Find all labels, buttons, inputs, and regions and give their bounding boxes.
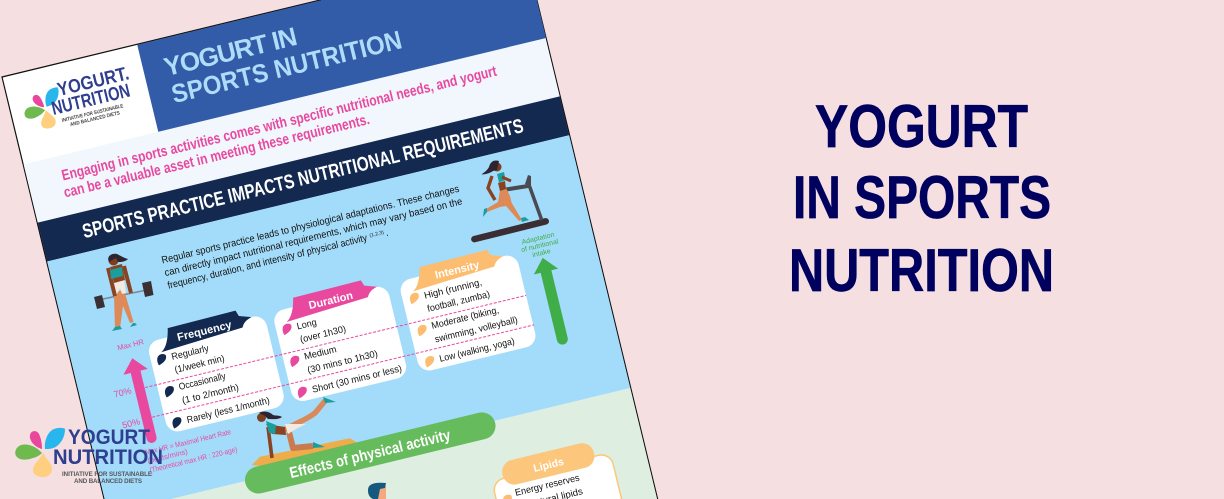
- arrow: heart rate: [120, 355, 165, 446]
- logo in header: [19, 63, 138, 138]
- heart rate note: (Theoretical max HR : 220-age): [149, 445, 239, 475]
- heart rate labels: [102, 337, 163, 431]
- panel: intro band: [24, 38, 560, 223]
- card: duration: [270, 275, 409, 404]
- heart rate note: (beats/mins): [146, 447, 189, 465]
- icon: logo flower: [20, 87, 67, 133]
- body paragraph: .: [384, 228, 390, 239]
- list: intensity levels: football, zumba): [426, 289, 491, 315]
- overlay logo: INITIATIVE FOR SUSTAINABLE: [62, 471, 152, 478]
- list: frequency levels: Occasionally: [178, 371, 227, 393]
- list: duration levels: Long: [296, 317, 318, 332]
- list: duration levels: (30 mins to 1h30): [306, 349, 379, 376]
- headline on right: NUTRITION: [789, 237, 1054, 304]
- tilted poster page: [2, 0, 694, 499]
- figure: weightlifter: [94, 254, 154, 331]
- intro text: [58, 63, 502, 201]
- nutritional intake label: of nutritional: [521, 238, 560, 254]
- headline on right: YOGURT: [815, 93, 1028, 160]
- tab: lipids: Lipids: [532, 456, 565, 475]
- logo in header: AND BALANCED DIETS: [70, 110, 121, 128]
- overlay logo: AND BALANCED DIETS: [74, 478, 142, 485]
- tab: frequency: [156, 307, 255, 352]
- card: intensity: [396, 243, 538, 373]
- title: SPORTS NUTRITION: [168, 24, 405, 109]
- nutritional intake label: Adaptation: [521, 232, 555, 246]
- icon: overlay logo flower: [15, 428, 65, 477]
- body paragraph: frequency, duration, and intensity of physical activity: [167, 233, 368, 292]
- tab: duration: Duration: [307, 290, 355, 312]
- figure: exercising woman: [257, 397, 336, 458]
- card: lipids: [488, 437, 639, 499]
- nutritional intake label: [519, 231, 561, 261]
- overlay logo: YOGURT: [68, 426, 150, 449]
- figure: treadmill runner: [470, 160, 550, 243]
- overlay logo: [15, 426, 163, 485]
- overlay logo: NUTRITION: [53, 446, 163, 469]
- tab: frequency: Frequency: [176, 319, 234, 344]
- intro text: Engaging in sports activities comes with specific nutritional needs, and yogurt: [60, 63, 498, 184]
- list: frequency levels: (1/week min): [174, 353, 226, 376]
- logo in header: NUTRITION: [50, 81, 132, 120]
- heart rate labels: 50%: [121, 416, 141, 430]
- figure: yoga mat: [252, 438, 358, 470]
- heart rate note: [144, 427, 239, 475]
- tab: intensity: [408, 246, 506, 291]
- heart rate labels: 70%: [113, 386, 132, 399]
- tab: lipids: [500, 441, 597, 487]
- list: intensity levels: Low (walking, yoga): [438, 336, 516, 365]
- section heading: SPORTS PRACTICE IMPACTS NUTRITIONAL REQUIREMENTS: [80, 115, 526, 243]
- headline on right: IN SPORTS: [793, 164, 1051, 231]
- heart rate note: Max HR = Maximal Heart Rate: [144, 427, 232, 457]
- body paragraph: (1,2,3): [369, 230, 385, 239]
- list: duration levels: (over 1h30): [299, 324, 347, 346]
- list: intensity levels: swimming, volleyball): [434, 315, 519, 345]
- card: frequency: [144, 304, 286, 434]
- pill: effects of physical activity: Effects of physical activity: [288, 427, 453, 482]
- list: duration levels: Short (30 mins or less): [311, 363, 403, 396]
- body paragraph: Regular sports practice leads to physiological adaptations. These changes: [160, 184, 460, 266]
- nutritional intake label: intake: [532, 248, 552, 259]
- pill: effects of physical activity: [242, 410, 498, 496]
- list: intensity levels: [409, 271, 524, 368]
- list: frequency levels: Regularly: [170, 343, 210, 363]
- list: intensity levels: High (running,: [423, 277, 483, 302]
- tab: intensity: Intensity: [434, 259, 481, 282]
- logo in header: INITIATIVE FOR SUSTAINABLE: [61, 103, 124, 124]
- panel: blue title header: [137, 0, 546, 132]
- panel: pale green effects section: [108, 388, 694, 499]
- arrow: nutritional intake: [531, 255, 576, 347]
- list: duration levels: Medium: [303, 344, 338, 363]
- intro text: can be a valuable asset in meeting these requirements.: [62, 111, 371, 201]
- figure: man (cropped): [368, 483, 386, 499]
- list: lipid roles: Energy reserves: [514, 473, 581, 499]
- heart rate labels: Max HR: [116, 337, 145, 352]
- panel: light blue sports practice section: [47, 135, 630, 499]
- headline on right: [789, 93, 1054, 304]
- panel: navy heading band: [38, 96, 569, 262]
- list: frequency levels: Rarely (less 1/month): [186, 395, 271, 426]
- logo in header: YOGURT.: [55, 63, 131, 101]
- list: frequency levels: (1 to 2/month): [181, 382, 240, 407]
- list: frequency levels: [156, 332, 271, 429]
- list: intensity levels: Moderate (biking,: [430, 305, 500, 332]
- list: duration levels: [281, 300, 403, 399]
- body paragraph: can directly impact nutritional requirements, which may vary based on the: [164, 196, 464, 279]
- title: YOGURT IN: [161, 21, 300, 82]
